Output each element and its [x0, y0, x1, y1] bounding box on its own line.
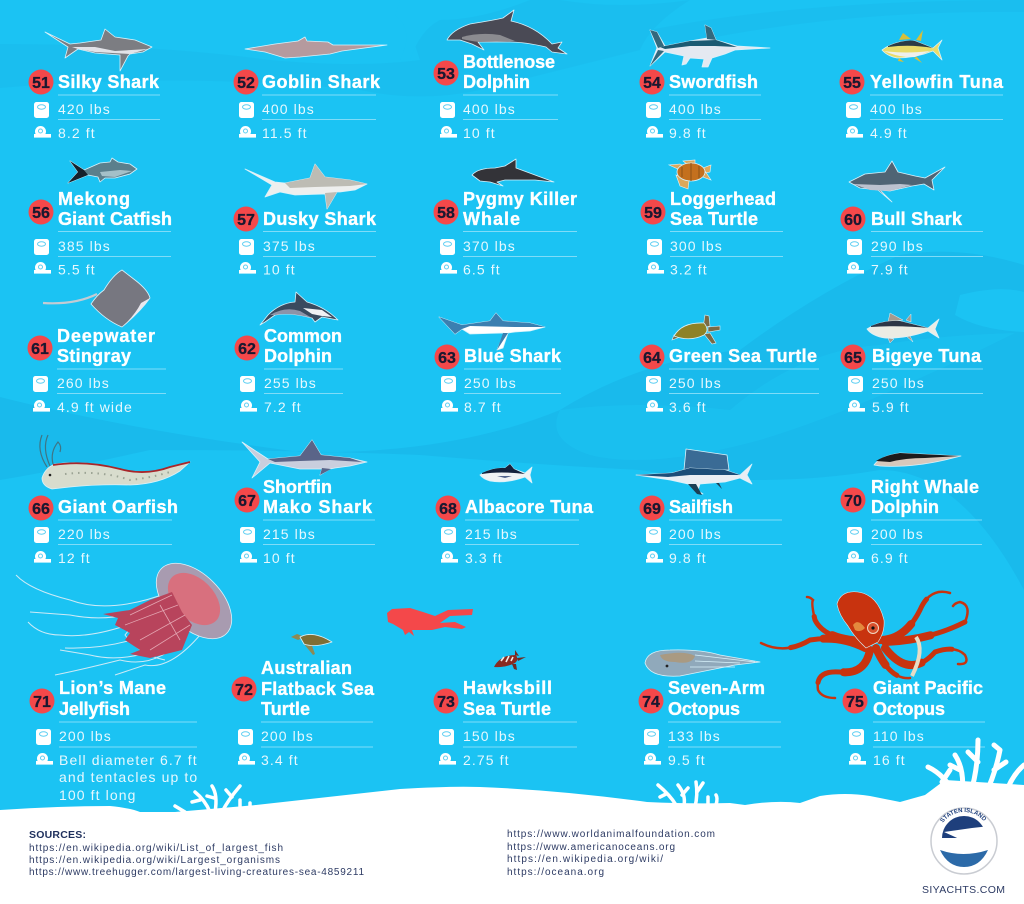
name: Giant Catfish — [58, 209, 172, 229]
number badge: 60 — [844, 212, 862, 229]
name — [57, 326, 155, 366]
weight — [33, 369, 166, 392]
card: 52 Goblin Shark — [234, 37, 387, 141]
illustration: albacore tuna — [480, 464, 532, 483]
number badge: 64 — [643, 350, 661, 367]
length — [849, 747, 985, 768]
length: 4.9 ft — [870, 125, 908, 141]
length — [847, 544, 982, 566]
length: 9.8 ft — [669, 550, 707, 566]
number badge — [434, 200, 458, 224]
name: Deepwater — [57, 326, 155, 346]
number badge — [842, 688, 868, 714]
length: 3.3 ft — [465, 550, 503, 566]
illustration: common dolphin — [260, 292, 338, 325]
weight: 300 lbs — [670, 238, 723, 254]
number badge: 59 — [644, 205, 662, 222]
name — [670, 189, 776, 229]
seabed — [0, 787, 1024, 904]
card: 51 Silky Shark — [28, 29, 160, 141]
weight: 250 lbs — [464, 375, 517, 391]
illustration: goblin shark — [245, 37, 387, 58]
name — [463, 52, 555, 92]
length: 4.9 ft wide — [57, 399, 133, 415]
card: 64 Green Sea Turtle — [640, 315, 819, 415]
length: 8.2 ft — [58, 125, 96, 141]
card: 68 Albacore Tuna — [436, 464, 594, 566]
number badge: 53 — [437, 66, 455, 83]
number badge — [840, 70, 864, 94]
illustration: giant oarfish — [40, 435, 190, 489]
illustration: sailfish — [636, 449, 752, 495]
number badge: 68 — [439, 501, 457, 518]
name: Bull Shark — [871, 209, 963, 229]
weight: 400 lbs — [669, 101, 722, 117]
length: 9.8 ft — [669, 125, 707, 141]
name — [261, 658, 375, 719]
length — [848, 394, 983, 415]
name: Right Whale — [871, 477, 979, 497]
name: Shortfin — [263, 477, 332, 497]
number badge: 66 — [32, 501, 50, 518]
illustration: bigeye tuna — [867, 313, 939, 343]
number badge — [28, 496, 54, 520]
number badge: 74 — [642, 694, 660, 711]
weight: 110 lbs — [873, 728, 925, 744]
card: 59 Loggerhead Sea Turtle — [640, 160, 783, 278]
length — [36, 747, 198, 803]
card: 57 Dusky Shark — [234, 164, 377, 278]
illustration: seven-arm octopus — [645, 650, 760, 676]
number badge: 55 — [843, 75, 861, 92]
weight — [34, 232, 171, 255]
name: Hawksbill — [463, 678, 552, 698]
card: 74 Seven-Arm Octopus — [638, 650, 781, 768]
name: Swordfish — [669, 72, 758, 92]
number badge — [234, 488, 260, 512]
card: 67 Shortfin Mako Shark — [234, 440, 375, 566]
length: 5.5 ft — [58, 262, 96, 278]
number badge: 58 — [437, 205, 455, 222]
length: 16 ft — [873, 752, 906, 768]
diver silhouette — [387, 608, 473, 636]
coral: left — [175, 786, 250, 812]
weight: 420 lbs — [58, 101, 111, 117]
weight — [240, 520, 375, 543]
name: Bottlenose — [463, 52, 555, 72]
length — [239, 256, 376, 278]
name: Australian — [261, 658, 352, 678]
card: 70 Right Whale Dolphin — [840, 453, 982, 566]
weight — [440, 232, 577, 255]
card: 61 Deepwater Stingray — [28, 270, 166, 415]
sources: left column: https://en.wikipedia.org/wiki/Largest_organisms — [29, 855, 280, 866]
number badge: 63 — [438, 350, 456, 367]
length: 5.9 ft — [872, 399, 910, 415]
weight: 200 lbs — [669, 526, 722, 542]
sources: left column: https://en.wikipedia.org/wiki/List_of_largest_fish — [29, 843, 283, 854]
number badge: 62 — [238, 341, 256, 358]
name: Sea Turtle — [463, 699, 551, 719]
weight — [847, 520, 982, 543]
length: 10 ft — [463, 125, 496, 141]
name: Octopus — [873, 699, 945, 719]
illustration: loggerhead sea turtle — [669, 160, 711, 189]
illustration: green sea turtle — [672, 315, 720, 344]
number badge: 56 — [32, 205, 50, 222]
name: Blue Shark — [464, 346, 562, 366]
name — [463, 678, 552, 719]
number badge — [28, 200, 54, 224]
length — [34, 544, 172, 566]
name: Octopus — [668, 699, 740, 719]
length: 12 ft — [58, 550, 91, 566]
weight — [849, 722, 985, 745]
name — [58, 189, 172, 229]
card: 72 Australian Flatback Sea Turtle — [232, 634, 375, 768]
length: 2.75 ft — [463, 752, 510, 768]
length: Bell diameter 6.7 ft — [59, 752, 198, 768]
length: 3.6 ft — [669, 399, 707, 415]
length: 7.9 ft — [871, 262, 909, 278]
length: 10 ft — [263, 550, 296, 566]
length — [644, 747, 781, 768]
weight — [646, 520, 782, 543]
name: Giant Pacific — [873, 678, 983, 698]
weight: 400 lbs — [262, 101, 315, 117]
number badge — [28, 336, 52, 360]
card: 73 Hawksbill Sea Turtle — [434, 650, 577, 768]
length: and tentacles up to — [59, 769, 198, 785]
length: 6.9 ft — [871, 550, 909, 566]
name — [264, 326, 342, 366]
name: Common — [264, 326, 342, 346]
sources: right column: https://en.wikipedia.org/wiki/ — [507, 854, 663, 865]
weight — [239, 232, 376, 255]
length — [240, 544, 375, 566]
sources: left column: https://www.treehugger.com/largest-living-creatures-sea-4859211 — [29, 867, 364, 878]
sources: right column: https://www.americanoceans.org — [507, 842, 675, 853]
number badge: 52 — [237, 75, 255, 92]
name: Goblin Shark — [262, 72, 381, 92]
number badge — [234, 206, 258, 232]
card: 65 Bigeye Tuna — [840, 313, 983, 415]
name: Green Sea Turtle — [669, 346, 817, 366]
weight: 133 lbs — [668, 728, 721, 744]
name: Giant Oarfish — [58, 497, 178, 517]
weight: 200 lbs — [261, 728, 314, 744]
illustration: blue shark — [439, 313, 545, 350]
illustration: hawksbill sea turtle — [494, 650, 526, 670]
illustration: bull shark — [849, 161, 945, 202]
name: Albacore Tuna — [465, 497, 594, 517]
illustration: pygmy killer whale — [472, 159, 554, 186]
weight — [847, 232, 983, 255]
number badge — [234, 70, 258, 94]
name: Dolphin — [871, 497, 939, 517]
length — [441, 544, 579, 566]
weight: 250 lbs — [872, 375, 925, 391]
length — [238, 747, 373, 768]
number badge — [436, 496, 460, 520]
number badge — [640, 496, 664, 520]
number badge: 54 — [643, 75, 661, 92]
weight: 400 lbs — [870, 101, 923, 117]
coral: right — [925, 740, 1024, 800]
illustration: dusky shark — [245, 164, 367, 209]
coral: centre — [658, 782, 717, 807]
weight: 260 lbs — [57, 375, 110, 391]
name — [668, 678, 765, 719]
length — [646, 394, 819, 415]
name — [871, 477, 979, 517]
card: 71 Lion's Mane Jellyfish — [16, 549, 246, 803]
weight: 375 lbs — [263, 238, 316, 254]
weight: 290 lbs — [871, 238, 924, 254]
number badge: 71 — [33, 694, 51, 711]
illustration: yellowfin tuna — [882, 30, 942, 63]
weight — [647, 232, 783, 255]
weight — [36, 722, 197, 745]
length — [646, 544, 782, 566]
weight — [238, 722, 373, 745]
length: 7.2 ft — [264, 399, 302, 415]
weight: 200 lbs — [59, 728, 112, 744]
card: 58 Pygmy Killer Whale — [434, 159, 577, 278]
illustration: silky shark — [45, 29, 152, 71]
sources: right column: https://www.worldanimalfoundation.com — [507, 829, 715, 840]
name: Whale — [463, 209, 520, 229]
illustration: lion's mane jellyfish — [16, 549, 246, 675]
number badge — [638, 688, 664, 714]
number badge — [232, 676, 256, 702]
number badge — [840, 206, 866, 232]
name: Sailfish — [669, 497, 733, 517]
length — [440, 256, 577, 278]
card: 75 Giant Pacific Octopus — [761, 592, 985, 768]
name: Pygmy Killer — [463, 189, 577, 209]
illustration: bottlenose dolphin — [447, 10, 567, 54]
weight — [34, 520, 172, 543]
weight — [848, 369, 983, 392]
length: 100 ft long — [59, 787, 136, 803]
name: Stingray — [57, 346, 131, 366]
name: Dusky Shark — [263, 209, 377, 229]
weight — [441, 520, 579, 543]
weight: 220 lbs — [58, 526, 111, 542]
length — [439, 747, 577, 768]
length: 11.5 ft — [262, 125, 308, 141]
number badge — [840, 488, 866, 512]
length: 9.5 ft — [668, 752, 706, 768]
logo — [930, 807, 998, 875]
length — [34, 256, 171, 278]
card: 62 Common Dolphin — [234, 292, 343, 415]
weight — [646, 369, 819, 392]
name: Loggerhead — [670, 189, 776, 209]
number badge: 65 — [844, 350, 862, 367]
number badge — [840, 344, 866, 370]
number badge: 72 — [235, 682, 253, 699]
length — [847, 256, 983, 278]
weight: 385 lbs — [58, 238, 111, 254]
illustration: giant pacific octopus — [761, 592, 968, 698]
length: 8.7 ft — [464, 399, 502, 415]
name: Jellyfish — [59, 699, 130, 719]
name — [873, 678, 983, 719]
number badge: 69 — [643, 501, 661, 518]
illustration: flatback sea turtle — [291, 634, 332, 655]
name: Sea Turtle — [670, 209, 758, 229]
weight: 215 lbs — [263, 526, 316, 542]
card: 55 Yellowfin Tuna — [840, 30, 1004, 141]
weight: 250 lbs — [669, 375, 722, 391]
card: 66 Giant Oarfish — [28, 435, 190, 566]
illustration: swordfish — [650, 25, 770, 67]
weight — [439, 722, 577, 745]
sources: left column: SOURCES: — [29, 829, 86, 841]
card: 69 Sailfish — [636, 449, 782, 566]
name — [59, 678, 166, 719]
number badge — [30, 688, 54, 714]
illustration: deepwater stingray — [43, 270, 150, 327]
name — [263, 477, 373, 517]
name: Seven-Arm — [668, 678, 765, 698]
weight: 255 lbs — [264, 375, 317, 391]
length: 3.2 ft — [670, 262, 708, 278]
length — [33, 394, 166, 415]
number badge — [640, 200, 666, 224]
sources: left column — [29, 829, 364, 878]
length — [647, 256, 783, 278]
illustration: right whale dolphin — [874, 453, 961, 466]
length — [239, 120, 376, 141]
name: Mekong — [58, 189, 130, 209]
number badge: 57 — [237, 212, 255, 229]
name: Mako Shark — [263, 497, 373, 517]
sources: right column: https://oceana.org — [507, 867, 604, 878]
name: Bigeye Tuna — [872, 346, 982, 366]
card: 53 Bottlenose Dolphin — [434, 10, 567, 141]
number badge: 67 — [238, 493, 256, 510]
length: 3.4 ft — [261, 752, 299, 768]
number badge — [434, 688, 458, 714]
weight: 400 lbs — [463, 101, 516, 117]
number badge: 61 — [31, 341, 49, 358]
name: Yellowfin Tuna — [870, 72, 1004, 92]
name: Lion’s Mane — [59, 678, 166, 698]
card: 54 Swordfish — [640, 25, 770, 141]
number badge — [640, 344, 664, 370]
weight — [239, 95, 376, 118]
name: Dolphin — [264, 346, 332, 366]
weight: 200 lbs — [871, 526, 924, 542]
card: 63 Blue Shark — [434, 313, 562, 415]
length: 6.5 ft — [463, 262, 501, 278]
name: Flatback Sea — [261, 679, 375, 699]
weight — [846, 95, 1003, 118]
illustration: mekong giant catfish — [68, 158, 137, 183]
name: Silky Shark — [58, 72, 160, 92]
weight — [644, 722, 781, 745]
name — [463, 189, 577, 229]
logo: STATEN ISLAND — [940, 808, 986, 822]
illustration: shortfin mako shark — [242, 440, 367, 478]
sources: right column — [507, 829, 715, 878]
card: 60 Bull Shark — [840, 161, 983, 278]
number badge: 73 — [437, 694, 455, 711]
weight: 215 lbs — [465, 526, 518, 542]
website label: SIYACHTS.COM — [922, 884, 1005, 896]
weight: 370 lbs — [463, 238, 516, 254]
card: 56 Mekong Giant Catfish — [28, 158, 172, 278]
weight: 150 lbs — [463, 728, 516, 744]
number badge: 75 — [846, 694, 864, 711]
length: 10 ft — [263, 262, 296, 278]
name: Dolphin — [463, 72, 530, 92]
name: Turtle — [261, 699, 310, 719]
number badge: 70 — [844, 493, 862, 510]
length — [846, 120, 1003, 141]
number badge: 51 — [32, 75, 50, 92]
